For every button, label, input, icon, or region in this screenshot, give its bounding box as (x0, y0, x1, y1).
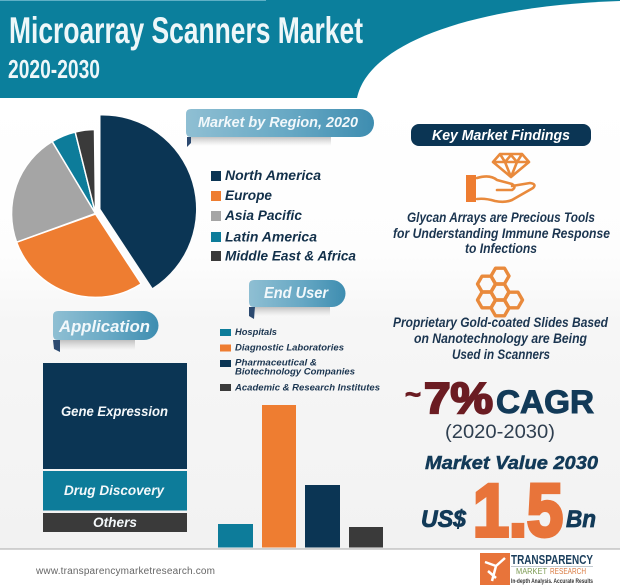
cagr callout: 7% (424, 374, 493, 423)
finding text: gold-coated slides: on Nanotechnology are Being (414, 331, 588, 346)
end user legend: Hospitals (235, 327, 277, 337)
end user legend: Diagnostic Laboratories (235, 342, 344, 352)
ribbon: end user (249, 280, 346, 319)
icon: hexagon nanostructure (478, 268, 522, 316)
finding text: glycan arrays: to Infections (465, 241, 537, 256)
cagr callout: (2020-2030) (445, 422, 555, 443)
ribbon: application (53, 311, 158, 352)
header banner (0, 0, 620, 98)
finding text: glycan arrays: Glycan Arrays are Precious Tools (407, 210, 595, 225)
ribbon: market by region (186, 109, 374, 147)
stacked chart: application: Drug Discovery (64, 483, 165, 498)
market value callout (421, 453, 598, 552)
logo: transparency market research: In-depth Analysis. Accurate Results (511, 579, 594, 585)
region legend: Middle East & Africa (225, 248, 356, 264)
finding text: glycan arrays (393, 210, 610, 256)
stacked chart: application: Others (93, 515, 137, 530)
end user legend: Academic & Research Institutes (234, 382, 380, 392)
logo: transparency market research: RESEARCH (550, 567, 586, 576)
cagr callout (405, 374, 594, 443)
market value callout: Bn (566, 506, 596, 533)
end user legend (220, 327, 380, 392)
stacked chart: application (43, 363, 187, 532)
title: 2020-2030 (8, 54, 100, 84)
region legend: Latin America (225, 230, 318, 244)
heading: key market findings (411, 124, 591, 146)
region legend: North America (225, 168, 322, 183)
cagr callout: ~ (405, 379, 421, 409)
bar chart: end user (218, 405, 383, 548)
pie chart: market by region (12, 115, 196, 297)
logo: transparency market research: TRANSPARENCY (511, 552, 593, 567)
ribbon: market by region: Market by Region, 2020 (198, 114, 359, 131)
icon: diamond over hand (466, 154, 534, 202)
heading: key market findings: Key Market Findings (432, 127, 570, 144)
region legend: Europe (225, 188, 272, 203)
ribbon: end user: End User (264, 285, 329, 302)
footer url: www.transparencymarketresearch.com (35, 566, 215, 577)
cagr callout: CAGR (496, 384, 594, 420)
region legend (211, 168, 356, 264)
end user legend: Biotechnology Companies (235, 366, 355, 376)
region legend: Asia Pacific (224, 208, 302, 223)
logo: transparency market research: MARKET (516, 567, 547, 576)
market value callout: 1.5 (473, 469, 563, 552)
finding text: gold-coated slides (393, 315, 609, 362)
title: Microarray Scanners Market (9, 10, 363, 51)
end user legend: Pharmaceutical & (235, 358, 317, 368)
market value callout: US$ (421, 506, 467, 533)
stacked chart: application: Gene Expression (61, 404, 168, 419)
market value callout: Market Value 2030 (425, 453, 598, 473)
logo: transparency market research (480, 552, 594, 585)
ribbon: application: Application (58, 317, 150, 336)
finding text: gold-coated slides: Used in Scanners (452, 347, 550, 362)
title (8, 10, 363, 84)
